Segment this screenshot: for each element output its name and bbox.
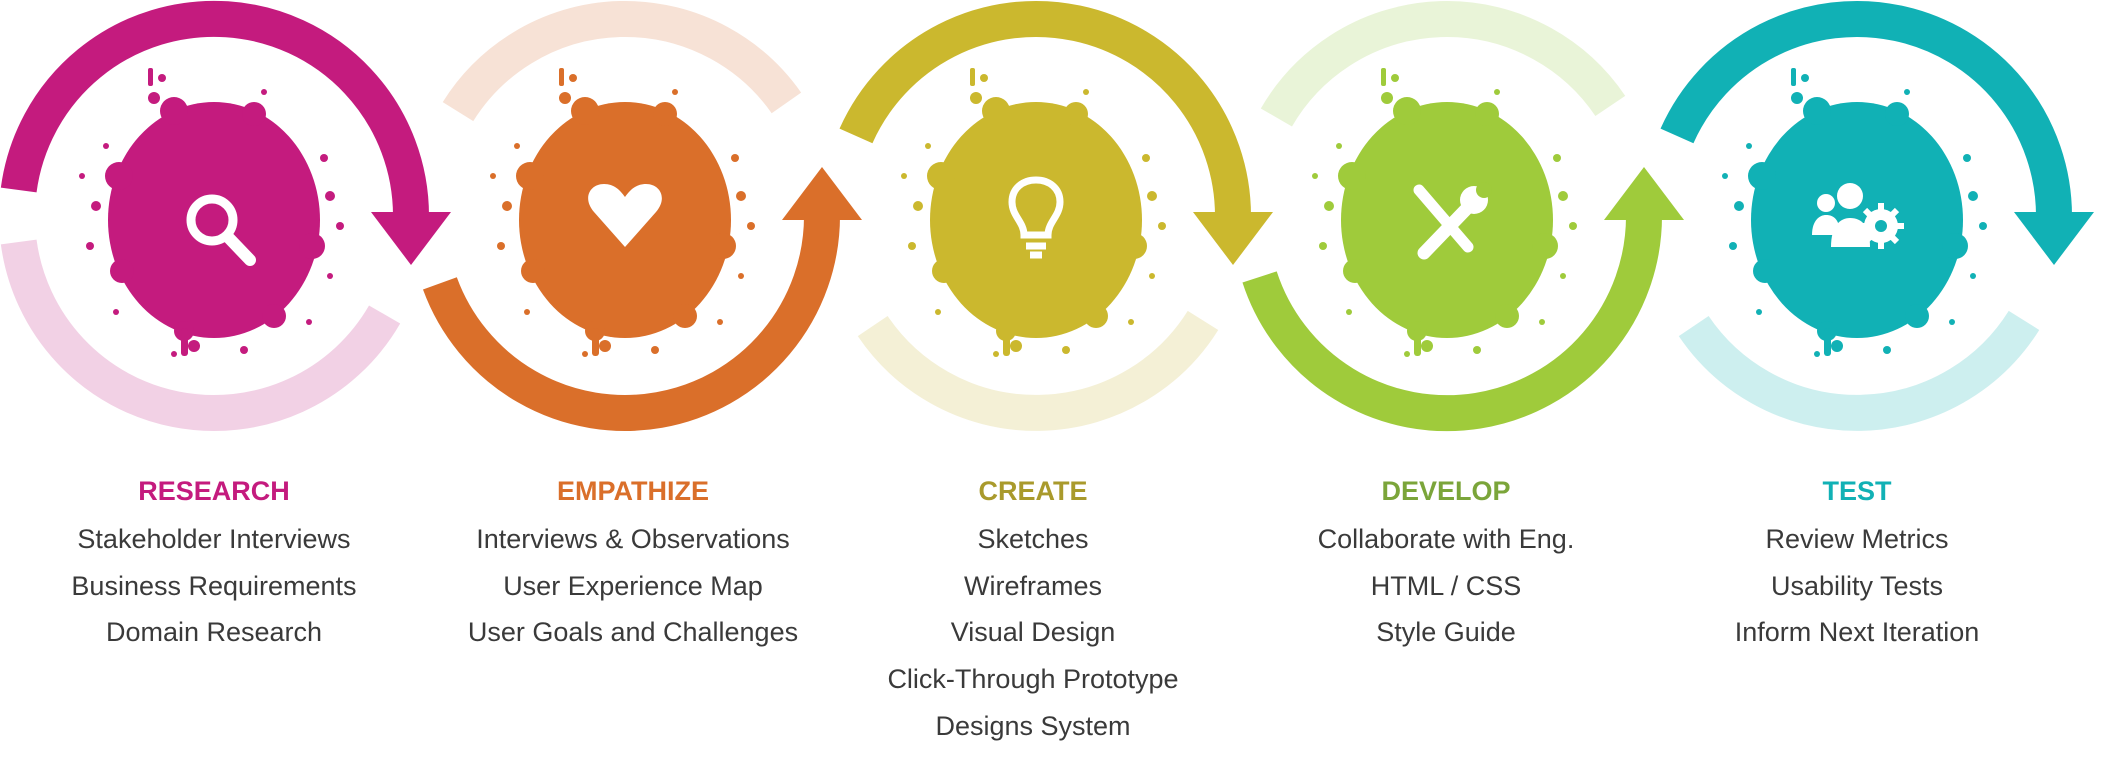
text: empathize: User Experience Map <box>503 571 763 601</box>
arc: test light <box>1694 320 2024 413</box>
arc: research light <box>19 242 385 413</box>
icon: magnifier <box>191 199 250 260</box>
stage: research <box>19 19 451 413</box>
text: create: CREATE <box>978 476 1088 506</box>
text: test: Inform Next Iteration <box>1735 617 1979 647</box>
text: empathize <box>468 476 798 647</box>
stage: empathize <box>440 19 862 413</box>
icon: light bulb <box>1012 180 1060 255</box>
arc: empathize dark with arrow <box>440 167 862 413</box>
text: test: Usability Tests <box>1771 571 1943 601</box>
text: research: RESEARCH <box>138 476 290 506</box>
text: research <box>71 476 357 647</box>
arc: research dark with arrow <box>19 19 451 265</box>
text: develop: Style Guide <box>1376 617 1516 647</box>
text: research: Business Requirements <box>71 571 357 601</box>
arc: develop dark with arrow <box>1260 167 1684 413</box>
splatter: empathize <box>490 68 755 357</box>
splatter: develop <box>1312 68 1577 357</box>
text: develop: DEVELOP <box>1381 476 1511 506</box>
splatter: create <box>901 68 1166 357</box>
text: test: TEST <box>1822 476 1892 506</box>
text: develop <box>1318 476 1574 647</box>
text: create: Click-Through Prototype <box>887 664 1179 694</box>
text: test <box>1735 476 1979 647</box>
text: create <box>887 476 1179 741</box>
text: create: Visual Design <box>951 617 1115 647</box>
text: research: Domain Research <box>106 617 322 647</box>
stage: develop <box>1260 19 1684 413</box>
icon: tools <box>1419 182 1492 253</box>
text: develop: HTML / CSS <box>1371 571 1521 601</box>
text: empathize: EMPATHIZE <box>557 476 709 506</box>
arc: develop light <box>1276 19 1610 117</box>
arc: create light <box>873 320 1203 413</box>
stage: create <box>856 19 1273 413</box>
splatter: test <box>1722 68 1987 357</box>
text: create: Wireframes <box>964 571 1102 601</box>
stage: test <box>1677 19 2094 413</box>
text: develop: Collaborate with Eng. <box>1318 524 1574 554</box>
text: test: Review Metrics <box>1765 524 1949 554</box>
arc: test dark with arrow <box>1677 19 2094 265</box>
text: create: Designs System <box>935 711 1131 741</box>
splatter: research <box>79 68 344 357</box>
text: empathize: Interviews & Observations <box>476 524 790 554</box>
icon: heart <box>588 184 662 247</box>
icon: users with gear <box>1812 183 1904 249</box>
arc: empathize light <box>458 19 786 112</box>
text: research: Stakeholder Interviews <box>77 524 351 554</box>
arc: create dark with arrow <box>856 19 1273 265</box>
text: create: Sketches <box>977 524 1089 554</box>
text: empathize: User Goals and Challenges <box>468 617 798 647</box>
